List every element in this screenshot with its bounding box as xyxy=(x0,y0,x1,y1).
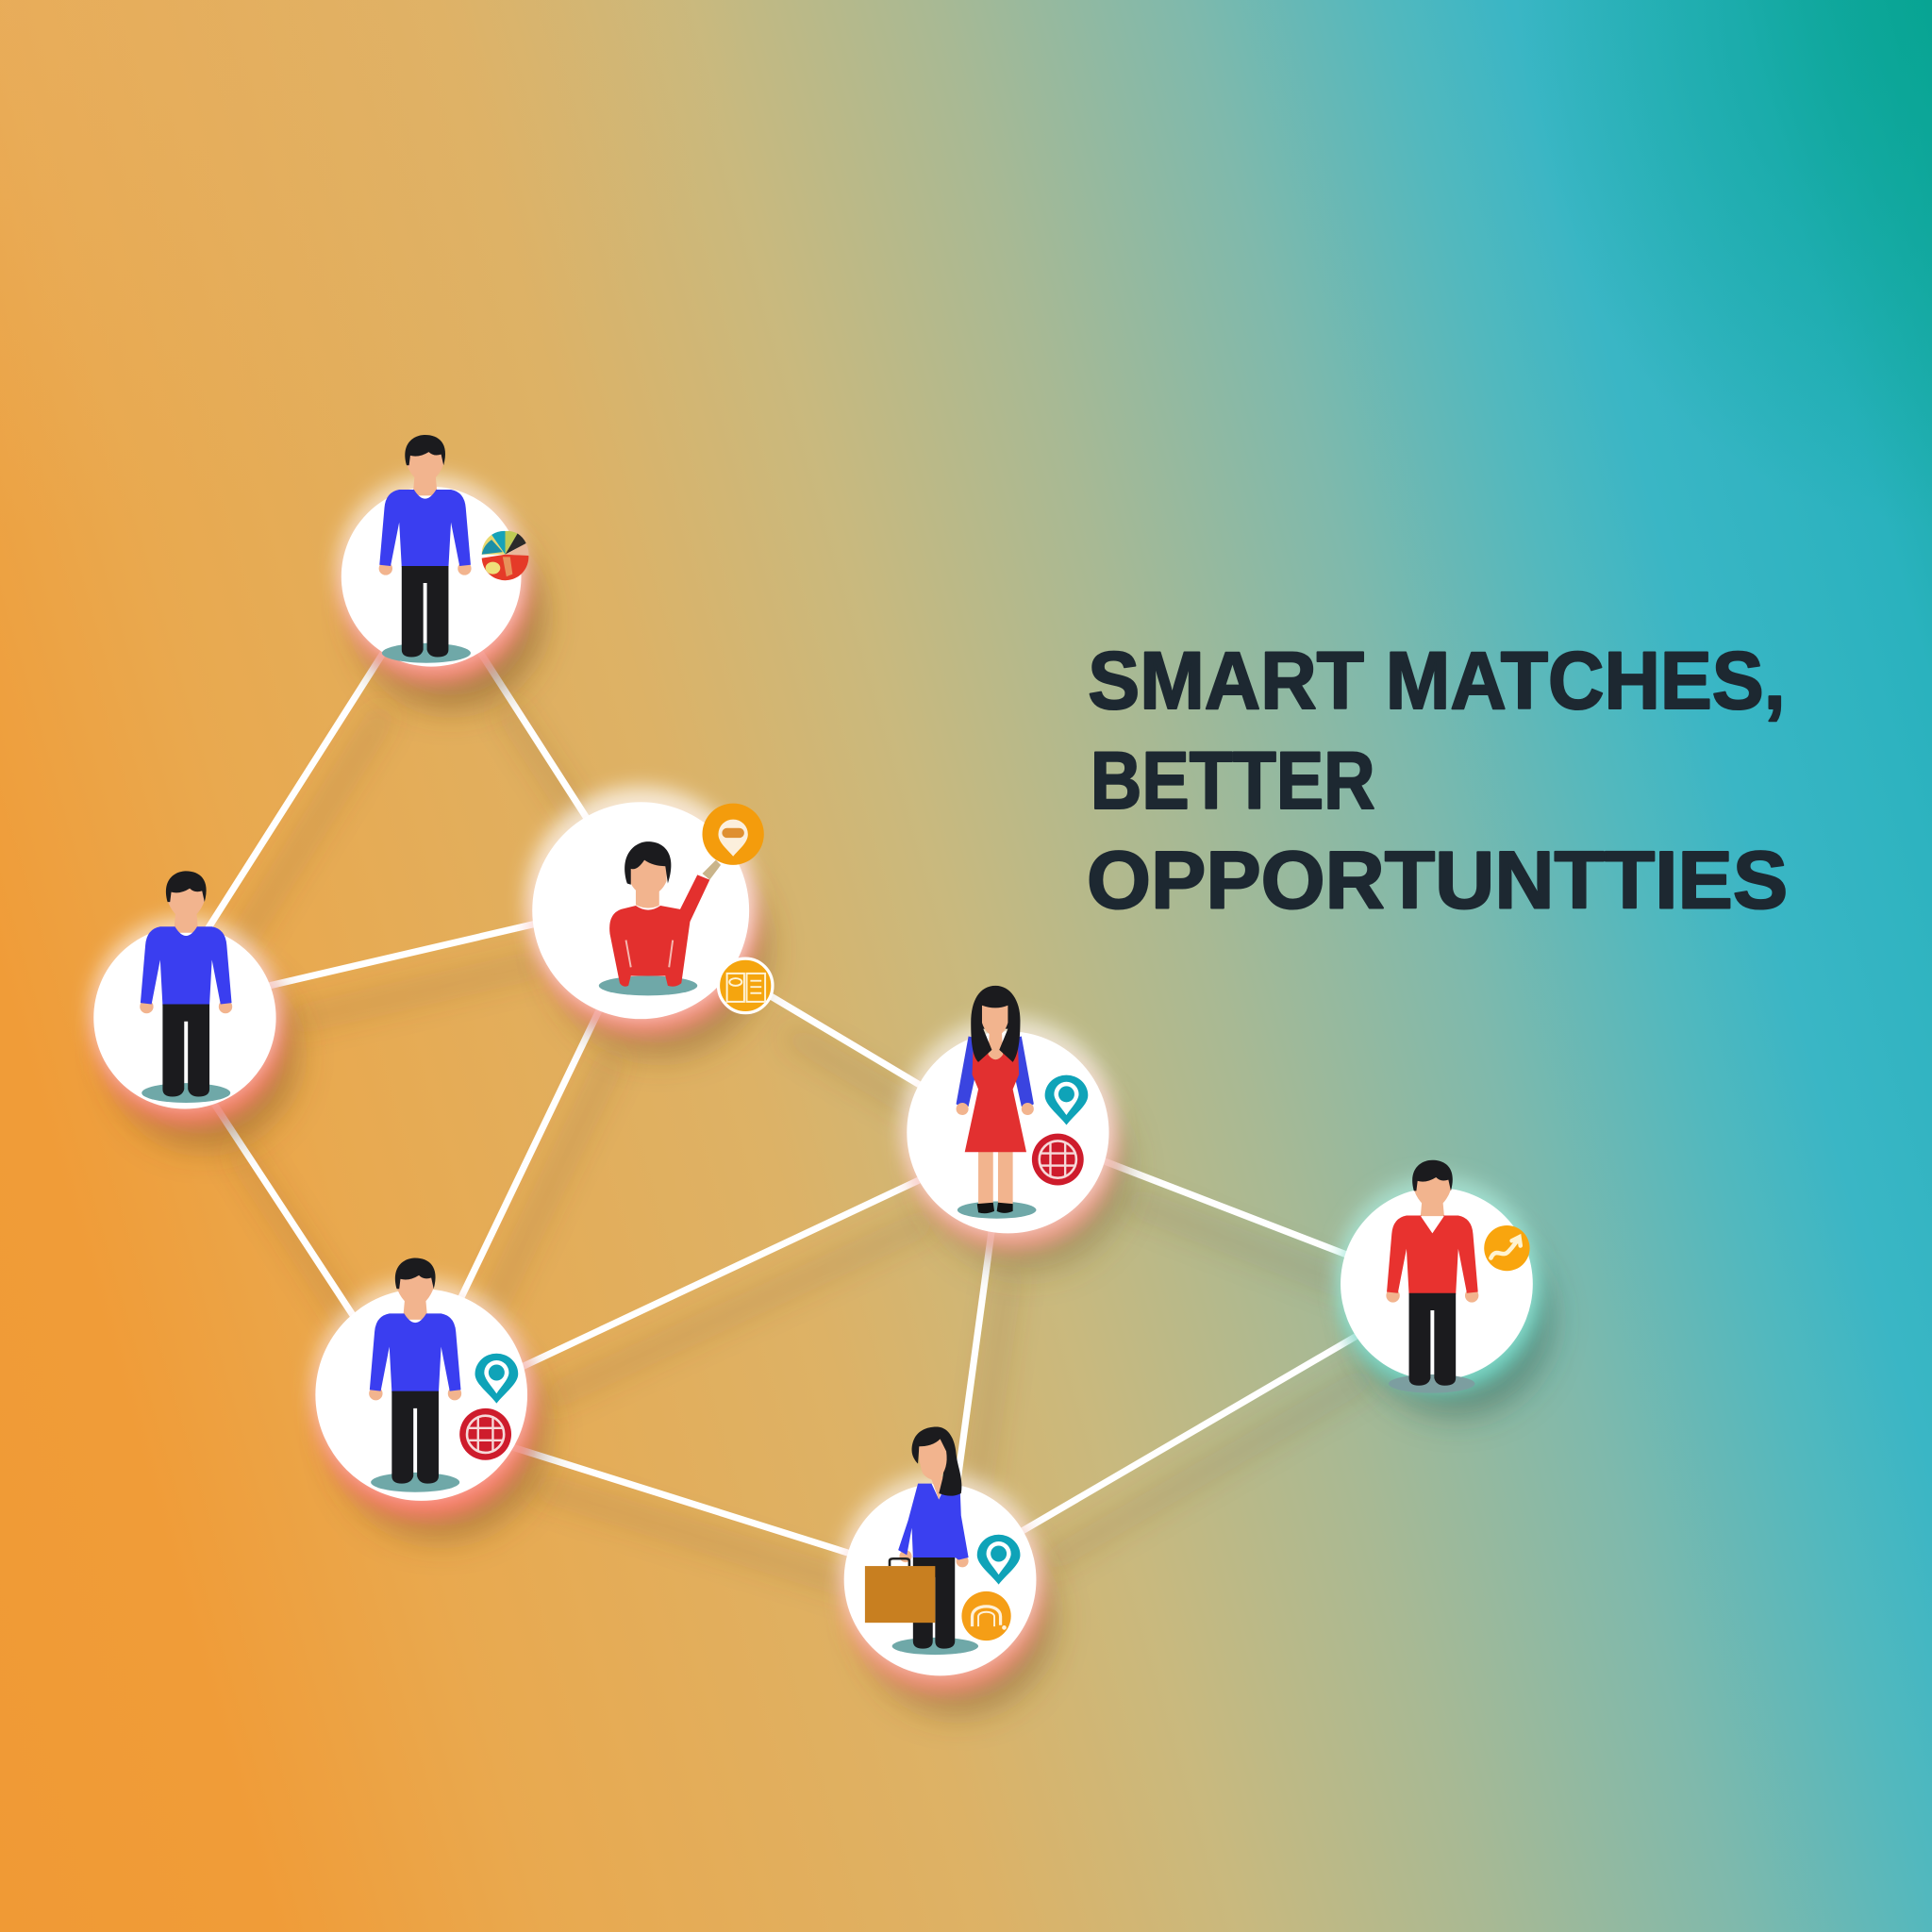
figure: woman with briefcase xyxy=(898,1426,969,1649)
icon: red globe xyxy=(459,1408,511,1460)
figure: man in red xyxy=(1386,1160,1478,1386)
connector shadows xyxy=(229,702,1375,1590)
node: centre person with raised arm xyxy=(526,786,773,1055)
icon: orange trend badge xyxy=(1484,1225,1530,1271)
icon: red globe xyxy=(1032,1134,1084,1185)
figure: man in blue xyxy=(140,871,232,1096)
node: bottom woman with briefcase xyxy=(841,1426,1052,1713)
node: woman in red dress xyxy=(901,986,1126,1269)
node: lower-left man xyxy=(313,1258,544,1538)
icon: teal pin xyxy=(475,1354,518,1404)
heading line 2: BETTER xyxy=(1091,736,1375,826)
node: right man in red xyxy=(1337,1160,1550,1414)
icon: teal pin xyxy=(1045,1075,1088,1124)
icon: orange location bubble xyxy=(702,804,764,865)
node: left man xyxy=(92,871,295,1146)
icon: briefcase xyxy=(865,1558,935,1623)
connector lines xyxy=(205,643,1368,1557)
icon: teal pin xyxy=(977,1535,1020,1585)
node: top man with colour wheel xyxy=(338,435,542,708)
figure: person in red xyxy=(609,841,721,987)
figure: man in blue xyxy=(379,435,472,657)
icon: orange book badge xyxy=(718,958,773,1013)
heading line 1: SMART MATCHES, xyxy=(1088,636,1786,726)
icon: colour wheel xyxy=(482,531,528,580)
heading line 3: OPPORTUNTTIES xyxy=(1087,836,1788,926)
figure: woman in red dress xyxy=(957,986,1034,1213)
icon: orange headset badge xyxy=(961,1591,1011,1641)
figure: man in blue xyxy=(369,1258,461,1484)
heading xyxy=(1087,636,1788,926)
